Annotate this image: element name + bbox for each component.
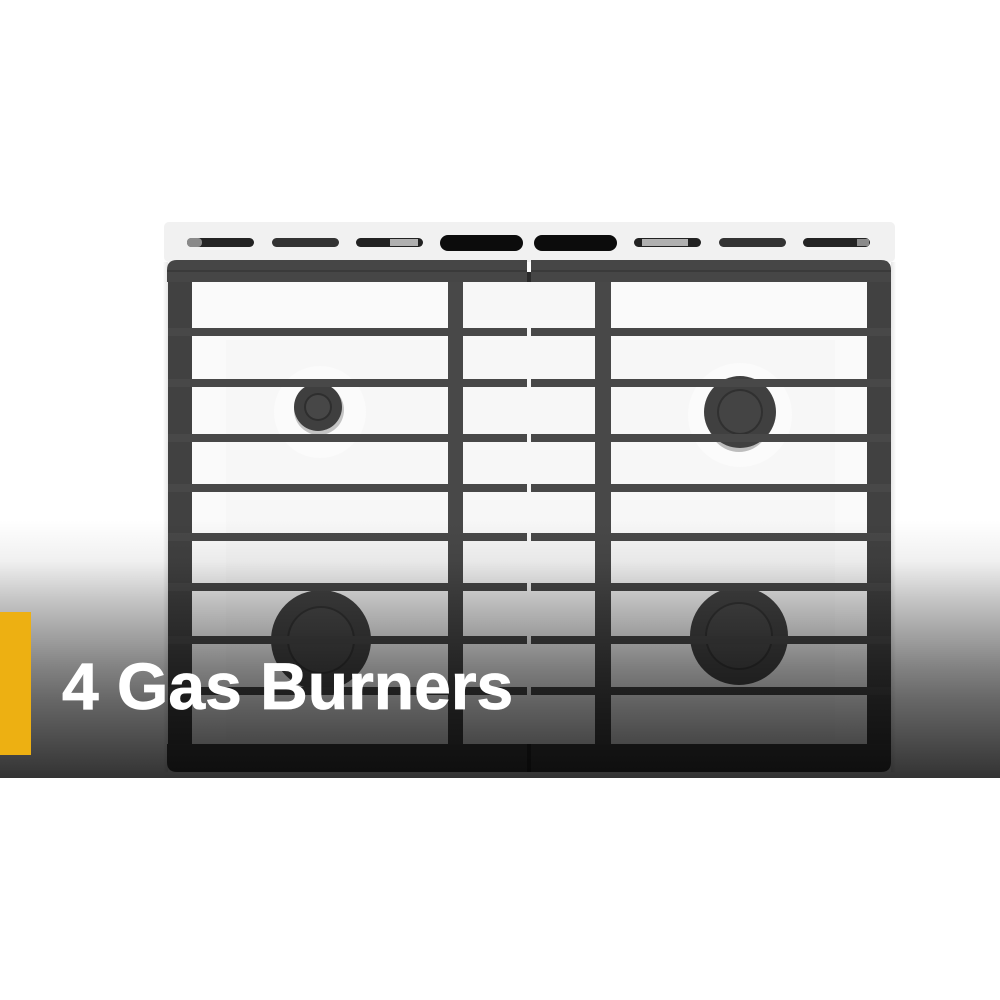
grate shadow edge: right: [891, 262, 896, 772]
title: 4 Gas Burners: [62, 649, 513, 723]
bottom bar: [531, 744, 891, 772]
top bar: [531, 260, 891, 282]
cross bars: [531, 328, 891, 336]
side rail: [168, 272, 192, 752]
interior panel: right: [611, 282, 867, 744]
right panel shading: [611, 340, 835, 740]
cooktop body: [163, 222, 896, 778]
bottom bar: [167, 744, 527, 772]
burner: bottom left large: [271, 590, 371, 690]
accent bar: [0, 612, 31, 755]
grate shadow edge: left: [163, 262, 168, 772]
burner: top right medium: [688, 363, 792, 467]
cross bars: [168, 328, 527, 336]
centre rail: [448, 275, 463, 747]
gradient overlay: [0, 520, 1000, 778]
grate: left half: [167, 260, 527, 772]
grate: right half: [531, 260, 891, 772]
burner: top left small: [274, 366, 366, 458]
control strip: [164, 222, 895, 262]
interior panel: centre: [463, 282, 595, 744]
left panel shading: [226, 340, 448, 740]
interior panel: left: [192, 282, 448, 744]
centre rail: [595, 275, 611, 747]
side rail: [867, 272, 891, 752]
vent slots: [187, 235, 870, 251]
burner: bottom right large: [690, 587, 788, 685]
grate centre joints: [527, 272, 531, 772]
top bar: [167, 260, 527, 282]
